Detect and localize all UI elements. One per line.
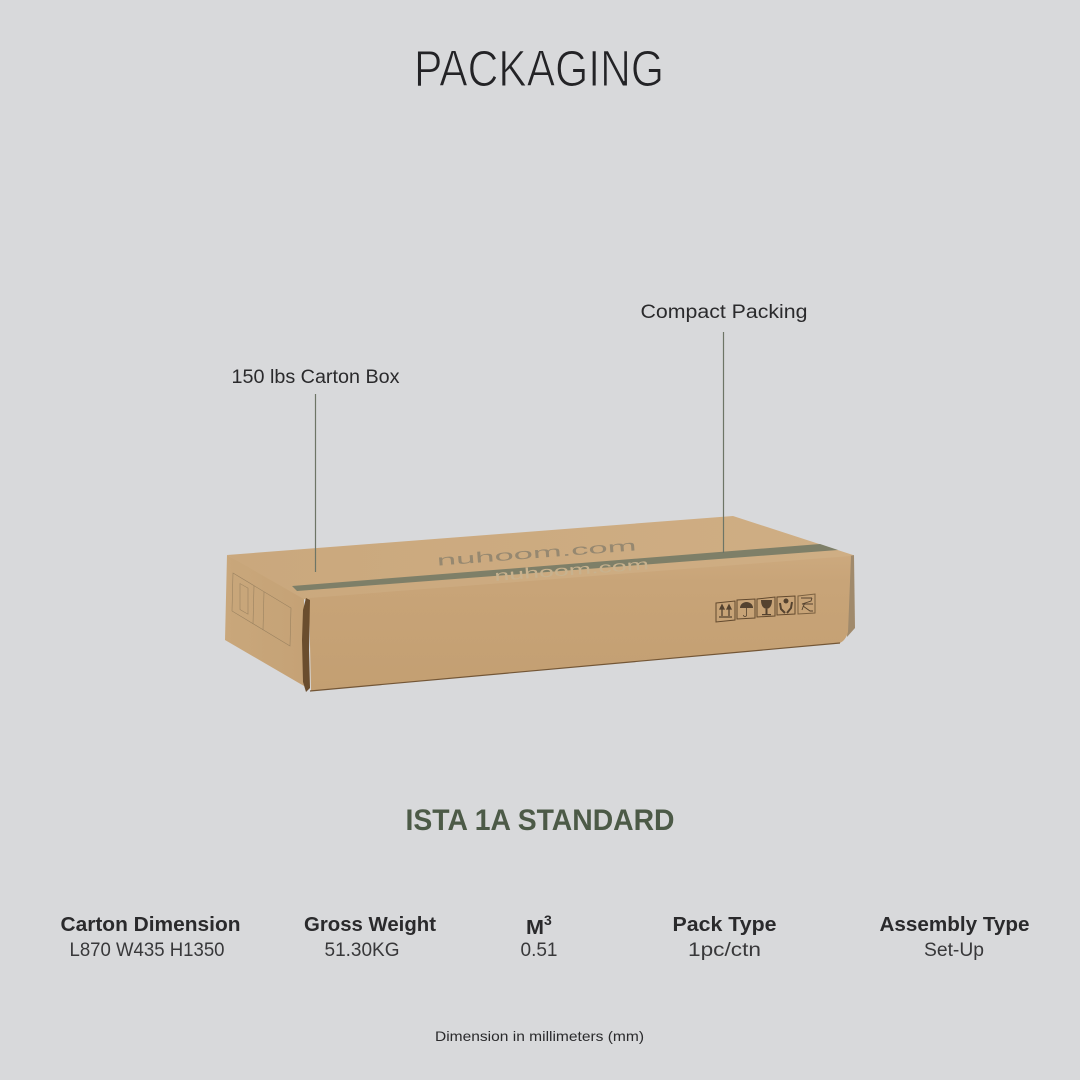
box corner seam	[302, 598, 310, 692]
spec: assembly type	[880, 914, 1030, 961]
icon: handle with care	[777, 596, 795, 615]
spec: assembly type: Set-Up	[924, 940, 984, 961]
spec: gross weight	[304, 914, 436, 961]
box front face	[309, 556, 851, 691]
spec: carton dimension	[60, 914, 240, 961]
icon: this way up	[716, 601, 735, 622]
spec: gross weight: Gross Weight	[304, 914, 436, 936]
spec: carton dimension: L870 W435 H1350	[70, 940, 224, 961]
spec: pack type: Pack Type	[672, 914, 776, 936]
icon: do not cut	[798, 594, 815, 614]
tape brand print: nuhoom.com	[494, 556, 650, 585]
callout: compact packing: Compact Packing	[640, 302, 808, 323]
box front bottom edge	[310, 643, 840, 691]
spec: pack type	[672, 914, 776, 961]
carton box illustration	[225, 516, 855, 692]
spec: cubic metres: 3	[544, 912, 552, 928]
box top face	[227, 516, 853, 602]
icon: fragile	[757, 597, 775, 617]
spec: pack type: 1pc/ctn	[688, 940, 761, 961]
spec: carton dimension: Carton Dimension	[60, 914, 240, 936]
title: PACKAGING	[414, 40, 664, 97]
spec: assembly type: Assembly Type	[880, 914, 1030, 936]
callout: 150 lbs carton box: 150 lbs Carton Box	[232, 367, 400, 388]
footnote: Dimension in millimeters (mm)	[435, 1028, 644, 1044]
spec: cubic metres	[520, 912, 558, 961]
spec: gross weight: 51.30KG	[324, 940, 400, 961]
top face brand print: nuhoom.com	[436, 537, 637, 570]
standard heading: ISTA 1A STANDARD	[406, 804, 674, 837]
box left end face	[225, 555, 304, 686]
spec: cubic metres: 0.51	[520, 940, 558, 961]
icon: keep dry	[737, 599, 755, 619]
handling icons	[716, 594, 815, 622]
left face label panel	[232, 573, 291, 646]
box right end flap	[847, 555, 855, 637]
green tape band	[292, 544, 838, 591]
spec: cubic metres: M	[526, 917, 544, 939]
